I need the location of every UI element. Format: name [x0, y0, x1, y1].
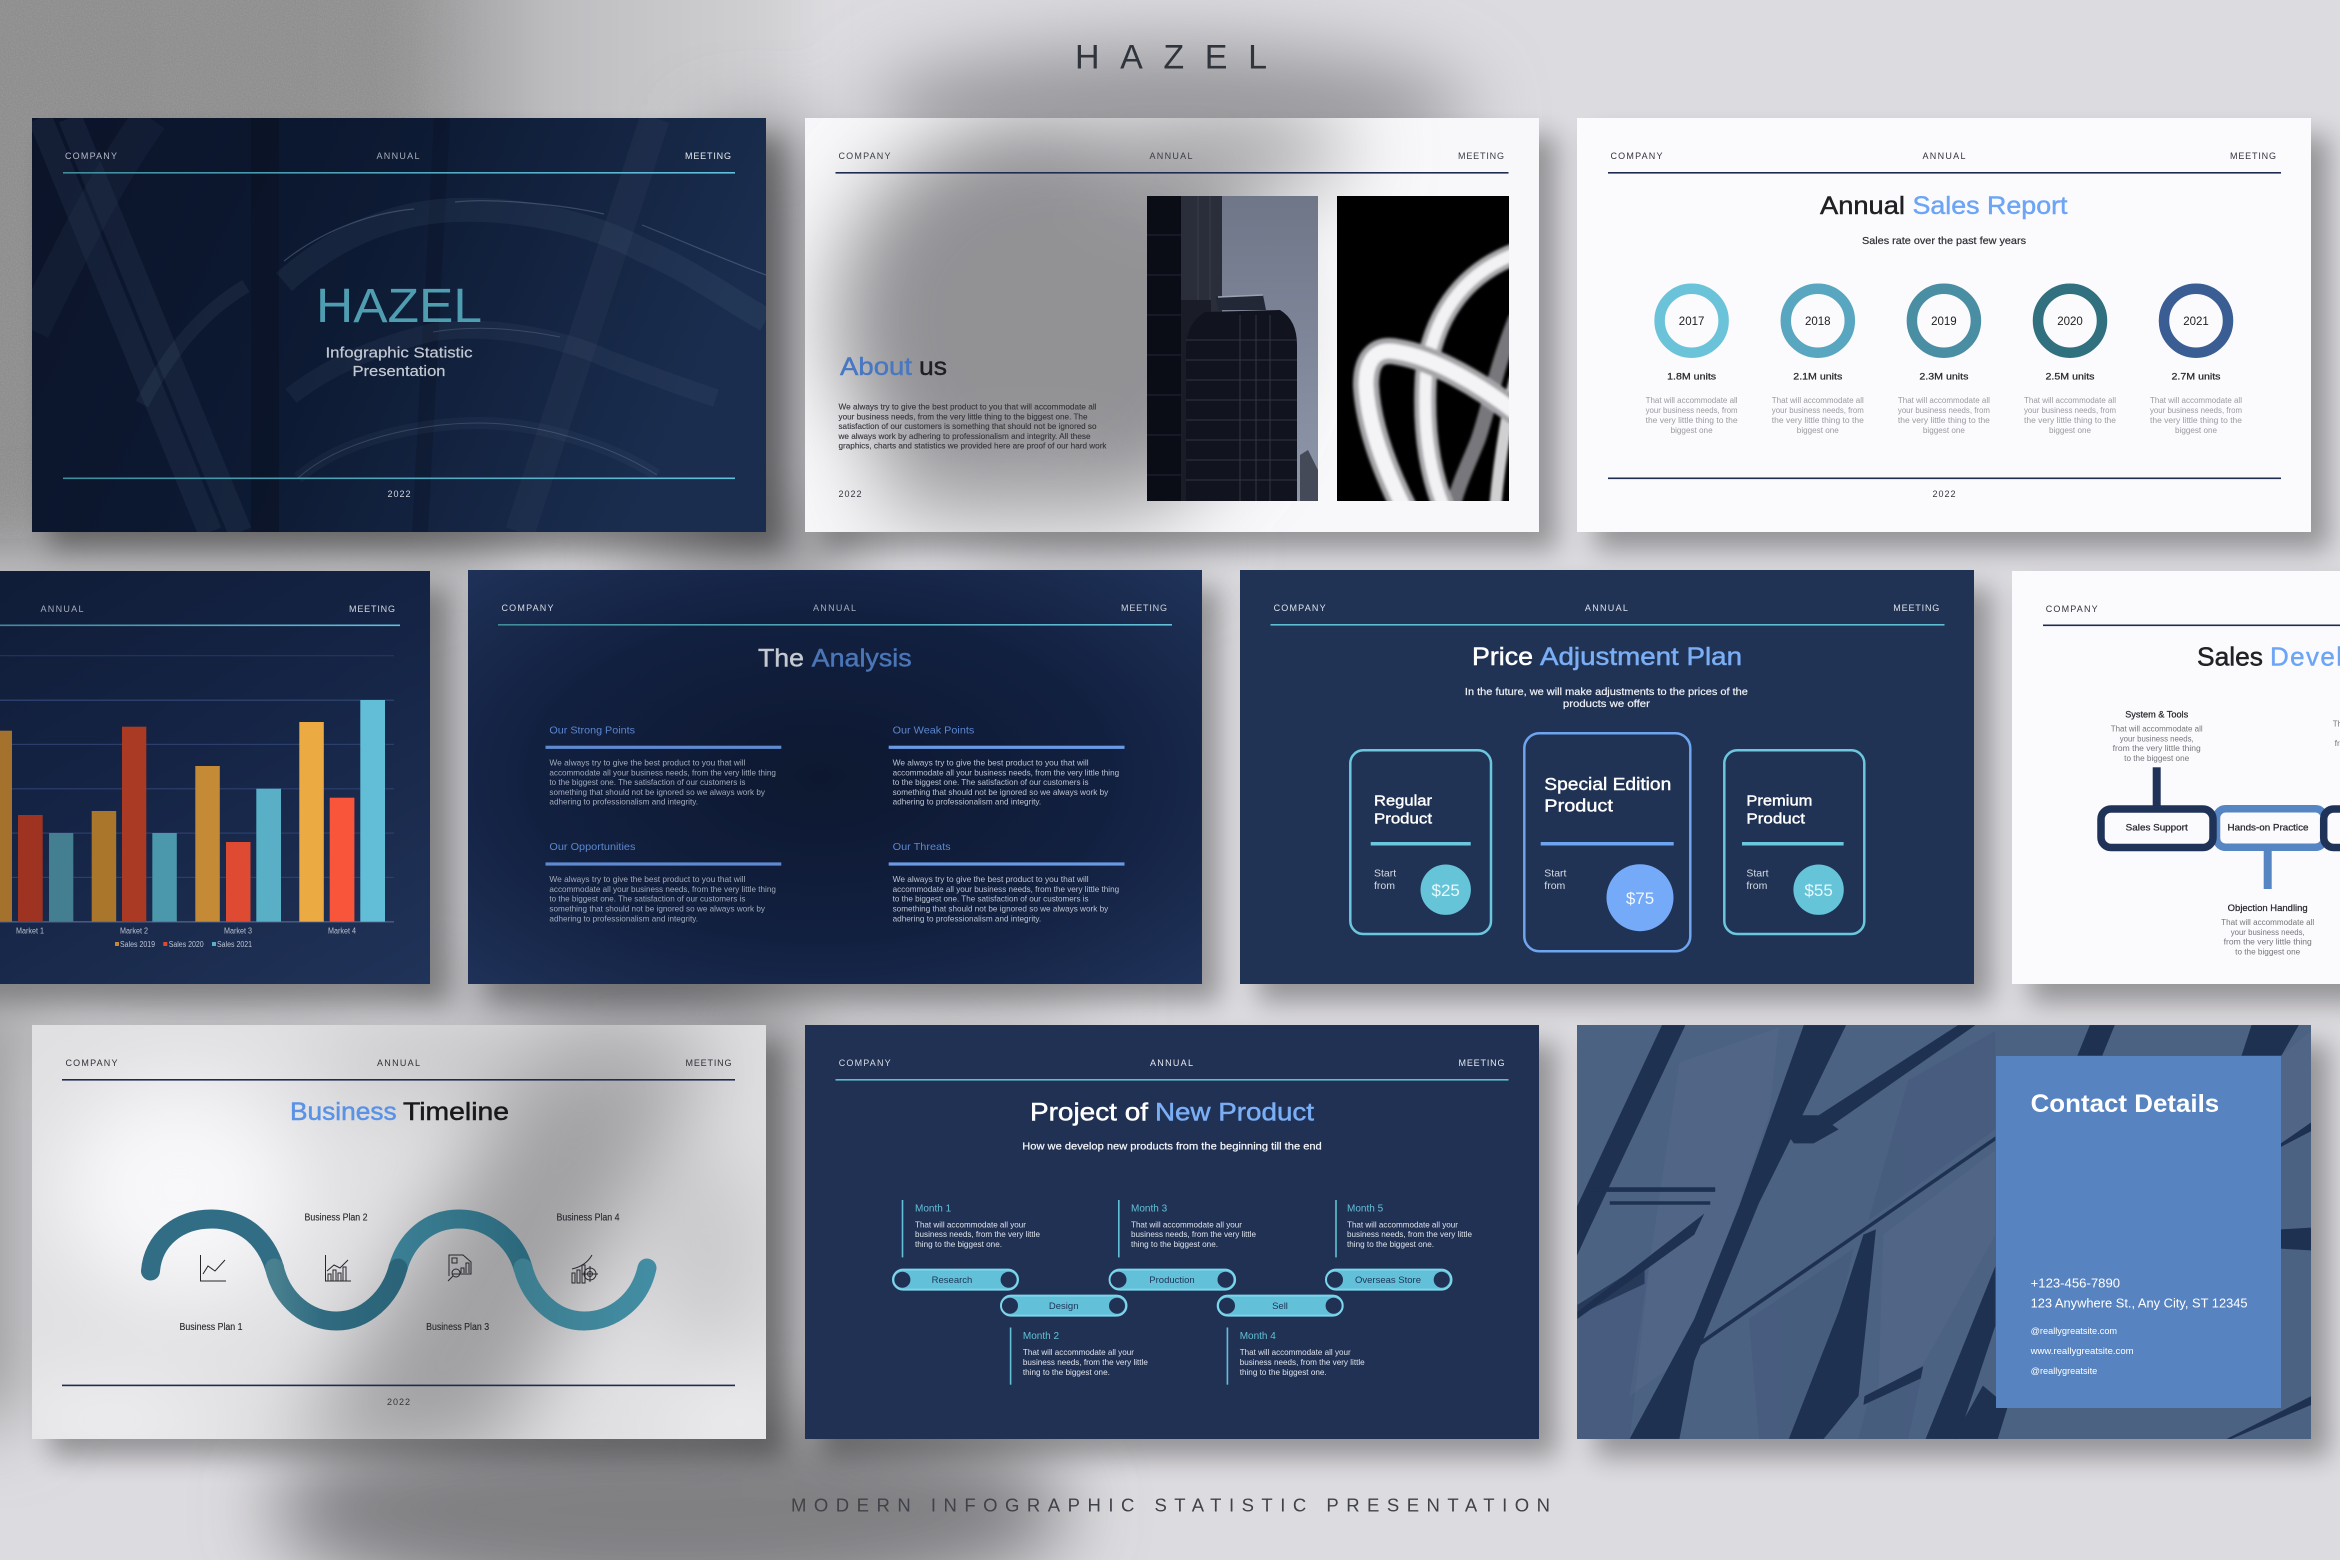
pill: research — [893, 1270, 1018, 1290]
ring descriptions: biggest one — [2049, 426, 2092, 435]
heading — [1820, 192, 2068, 220]
text: objection handling: your business needs, — [2231, 928, 2305, 937]
card: special edition product: Special Edition — [1544, 774, 1671, 794]
ring descriptions: That will accommodate all — [2150, 396, 2242, 405]
block: threats: to the biggest one. The satisfaction of our customers is — [893, 894, 1089, 904]
heading — [1030, 1098, 1314, 1126]
icon: line chart — [200, 1255, 226, 1281]
contact lines: +123-456-7890 — [2031, 1276, 2120, 1290]
text: objection handling: from the very little thing — [2224, 938, 2312, 946]
gridlines — [0, 655, 394, 923]
heading — [758, 645, 912, 673]
header labels: ANNUAL — [1585, 603, 1628, 613]
note: month 1: business needs, from the very little — [915, 1229, 1040, 1239]
heading: New Product — [1155, 1098, 1314, 1126]
ring descriptions: That will accommodate all — [2024, 396, 2116, 405]
subtitle: How we develop new products from the beginning till the end — [1022, 1141, 1322, 1153]
unit values: 2.1M units — [1793, 372, 1843, 382]
text: objection handling: Objection Handling — [2228, 903, 2308, 913]
note: month 5: business needs, from the very little — [1347, 1229, 1472, 1239]
card: regular product: Product — [1374, 810, 1433, 828]
header labels — [839, 1058, 1504, 1068]
heading: Business — [290, 1098, 397, 1126]
heading — [2197, 642, 2340, 672]
axis labels — [16, 926, 357, 936]
contact lines — [2030, 1276, 2248, 1377]
heading — [290, 1098, 509, 1126]
bars: market 3 — [195, 766, 281, 922]
ring descriptions: the very little thing to the — [1772, 416, 1864, 425]
block: opportunities: accommodate all your business needs, from the very little thing — [549, 884, 776, 894]
slide 2: about us — [805, 100, 1539, 532]
note: month 3: thing to the biggest one. — [1131, 1239, 1218, 1249]
ring descriptions: the very little thing to the — [1898, 416, 1990, 425]
block: weak points: accommodate all your business needs, from the very little thing — [893, 767, 1119, 777]
card: premium product: Premium — [1746, 792, 1812, 810]
card: special edition product: $75 — [1626, 889, 1654, 908]
card: special edition product: Start — [1544, 868, 1567, 880]
text: objection handling: to the biggest one — [2235, 948, 2301, 956]
note: month 3: business needs, from the very little — [1131, 1229, 1256, 1239]
year rings — [1660, 289, 2228, 353]
note: month 2: business needs, from the very little — [1023, 1357, 1148, 1367]
body text: We always try to give the best product to you that will accommodate all — [838, 401, 1097, 411]
contact lines: @reallygreatsite — [2031, 1366, 2097, 1377]
header labels: ANNUAL — [376, 151, 420, 161]
header labels: COMPANY — [66, 1058, 118, 1068]
heading: us — [919, 353, 947, 381]
ring descriptions: That will accommodate all — [1898, 396, 1990, 405]
block: threats — [889, 841, 1124, 923]
note: month 2: thing to the biggest one. — [1023, 1367, 1110, 1377]
ring descriptions: That will accommodate all — [1772, 396, 1864, 405]
header labels — [65, 151, 731, 161]
ring years — [1679, 316, 2209, 328]
ring descriptions: the very little thing to the — [2150, 416, 2243, 425]
header labels: MEETING — [1458, 151, 1504, 161]
year: 2022 — [388, 489, 410, 499]
ring years: 2017 — [1679, 316, 1704, 328]
icon: bars with trend — [326, 1255, 351, 1281]
note: month 4: business needs, from the very little — [1240, 1357, 1365, 1367]
slide 6: price adjustment plan — [1240, 570, 1974, 984]
text: clipped third column — [2333, 720, 2340, 748]
axis labels: Market 2 — [120, 926, 148, 936]
pill: production: Production — [1149, 1275, 1195, 1286]
bottom tagline: MODERN INFOGRAPHIC STATISTIC PRESENTATION — [791, 1495, 1550, 1516]
block: opportunities: We always try to give the best product to you that will — [549, 874, 745, 884]
year: 2022 — [1932, 489, 1956, 499]
header labels — [1274, 603, 1939, 613]
note: month 2: That will accommodate all your — [1023, 1347, 1134, 1357]
text: system and tools: System & Tools — [2125, 710, 2189, 720]
note: month 5 — [1335, 1200, 1472, 1257]
block: weak points: something that should not be ignored so we always work by — [893, 787, 1109, 797]
header labels: ANNUAL — [1922, 151, 1966, 161]
cover subtitle: Infographic Statistic — [326, 344, 473, 362]
ring descriptions: your business needs, from — [1772, 406, 1864, 415]
photo: steel beams — [1577, 1025, 2311, 1439]
icon: growth target — [572, 1255, 598, 1283]
bars: market 4 — [299, 700, 385, 922]
card: regular product — [1350, 750, 1491, 934]
note: month 3: Month 3 — [1131, 1204, 1168, 1214]
ring descriptions: your business needs, from — [2024, 406, 2116, 415]
header labels: MEETING — [686, 1058, 732, 1068]
slide 8: business timeline — [32, 1025, 766, 1439]
body text: graphics, charts and statistics we provided here are proof of our hard work — [838, 441, 1107, 451]
cover subtitle: Presentation — [352, 363, 446, 380]
connector and step: sales support: Sales Support — [2126, 822, 2188, 832]
axis labels: Market 4 — [328, 926, 357, 936]
pill: overseas store — [1326, 1270, 1452, 1290]
note: month 5: thing to the biggest one. — [1347, 1239, 1434, 1249]
year: 2022 — [838, 489, 862, 499]
subtitle: Sales rate over the past few years — [1862, 235, 2026, 247]
note: month 1 — [902, 1200, 1040, 1257]
block: threats: accommodate all your business needs, from the very little thing — [893, 884, 1119, 894]
text: system and tools: to the biggest one — [2124, 754, 2190, 763]
header labels: MEETING — [1893, 603, 1939, 613]
header labels: COMPANY — [838, 151, 890, 161]
chart legend: Sales 2020 — [169, 940, 204, 949]
block: strong points: something that should not be ignored so we always work by — [549, 787, 766, 797]
header labels: MEETING — [2230, 151, 2276, 161]
note: month 3: That will accommodate all your — [1131, 1219, 1242, 1229]
photo texture — [32, 118, 766, 532]
text: objection handling — [2221, 903, 2314, 956]
note: month 1: thing to the biggest one. — [915, 1239, 1002, 1249]
ring descriptions: That will accommodate all — [1646, 396, 1738, 405]
slide 5: the analysis — [468, 570, 1202, 984]
image: white tubes — [1337, 196, 1515, 510]
ring descriptions: biggest one — [2175, 426, 2218, 435]
heading: Timeline — [403, 1098, 509, 1126]
block: strong points: accommodate all your business needs, from the very little thing — [549, 767, 776, 777]
heading: The — [758, 645, 804, 673]
unit values: 2.7M units — [2172, 372, 2221, 382]
block: weak points: adhering to professionalism and integrity. — [893, 797, 1041, 807]
body text: we always work by adhering to professionalism and integrity. All these — [838, 431, 1091, 441]
ring years: 2019 — [1931, 316, 1957, 328]
heading: Sales — [2197, 642, 2263, 672]
panel: contact card — [1996, 1056, 2281, 1408]
connector and step: hands-on practice — [2216, 809, 2324, 889]
ring descriptions: your business needs, from — [2150, 406, 2242, 415]
contact lines: 123 Anywhere St., Any City, ST 12345 — [2031, 1296, 2248, 1310]
unit values: 2.3M units — [1919, 372, 1969, 382]
heading: About — [840, 353, 912, 381]
note: month 4: thing to the biggest one. — [1240, 1367, 1327, 1377]
block: opportunities — [546, 841, 781, 923]
pill: design — [1001, 1296, 1126, 1316]
block: weak points: Our Weak Points — [893, 724, 974, 736]
header labels: COMPANY — [1274, 603, 1326, 613]
heading: Adjustment Plan — [1540, 643, 1742, 671]
header labels: ANNUAL — [1150, 1058, 1193, 1068]
card: special edition product: Product — [1544, 796, 1613, 816]
header label: COMPANY — [2046, 604, 2098, 614]
header labels: COMPANY — [65, 151, 117, 161]
heading: Price — [1472, 643, 1533, 671]
step: clipped third — [2324, 809, 2340, 848]
ring descriptions: biggest one — [1671, 426, 1713, 435]
connector and step: sales support — [2101, 767, 2213, 848]
block: weak points — [889, 724, 1124, 807]
slide 1: cover — [32, 118, 766, 532]
block: threats: adhering to professionalism and integrity. — [893, 913, 1041, 923]
card: premium product: Start — [1746, 868, 1769, 880]
pill: sell — [1218, 1296, 1343, 1316]
cover title: HAZEL — [316, 280, 482, 333]
note: month 5: That will accommodate all your — [1347, 1219, 1458, 1229]
block: opportunities: to the biggest one. The satisfaction of our customers is — [549, 894, 745, 904]
block: opportunities: adhering to professionalism and integrity. — [549, 913, 698, 923]
card: special edition product: from — [1544, 880, 1566, 892]
pill: overseas store: Overseas Store — [1355, 1275, 1421, 1286]
block: threats: We always try to give the best product to you that will — [893, 874, 1089, 884]
text: system and tools: from the very little thing — [2113, 744, 2201, 753]
ring descriptions: biggest one — [1797, 426, 1839, 435]
timeline labels: Business Plan 2 — [304, 1212, 368, 1224]
year: 2022 — [387, 1397, 410, 1407]
text: system and tools: That will accommodate all — [2111, 724, 2203, 734]
unit values — [1667, 372, 2221, 382]
ring descriptions: your business needs, from — [1898, 406, 1990, 415]
header labels: MEETING — [685, 151, 731, 161]
header labels: MEETING — [1121, 603, 1167, 613]
card: premium product: Product — [1746, 810, 1806, 828]
header labels: ANNUAL — [377, 1058, 420, 1068]
header labels: MEETING — [1458, 1058, 1504, 1068]
header labels — [66, 1058, 732, 1068]
card: premium product: from — [1746, 880, 1768, 892]
text: system and tools — [2111, 710, 2203, 763]
block: strong points: to the biggest one. The satisfaction of our customers is — [549, 777, 745, 787]
subtitle: In the future, we will make adjustments to the prices of the — [1465, 686, 1748, 698]
card: regular product: $25 — [1432, 881, 1460, 900]
block: strong points: We always try to give the best product to you that will — [549, 757, 745, 767]
block: strong points: Our Strong Points — [549, 724, 635, 736]
block: opportunities: Our Opportunities — [549, 841, 635, 853]
chart legend: Sales 2019 — [120, 940, 155, 949]
header labels: COMPANY — [839, 1058, 891, 1068]
axis labels: Market 1 — [16, 926, 44, 936]
slide 4: bar chart — [0, 571, 430, 984]
heading: Sales Report — [1912, 192, 2068, 220]
body text — [838, 401, 1107, 451]
chart legend — [115, 940, 252, 949]
header labels: COMPANY — [1610, 151, 1662, 161]
connector and step: hands-on practice: Hands-on Practice — [2228, 822, 2308, 832]
card: premium product — [1724, 750, 1864, 934]
timeline labels: Business Plan 4 — [556, 1212, 620, 1224]
timeline labels — [180, 1212, 620, 1333]
header labels — [838, 151, 1504, 161]
image: tower — [1147, 196, 1318, 501]
note: month 2 — [1010, 1328, 1148, 1385]
pill: design: Design — [1049, 1301, 1078, 1312]
note: month 1: Month 1 — [915, 1204, 952, 1214]
card: premium product: $55 — [1804, 881, 1833, 900]
heading: Annual — [1820, 192, 1905, 220]
slide 3: annual sales report — [1577, 118, 2311, 532]
body text: satisfaction of our customers is something that should not be ignored so — [838, 421, 1097, 431]
block: threats: Our Threats — [893, 841, 951, 853]
body text: your business needs, from the very little thing to the biggest one. The — [838, 411, 1088, 421]
pill: production — [1110, 1270, 1235, 1290]
header labels — [502, 603, 1167, 613]
block: threats: something that should not be ignored so we always work by — [893, 904, 1109, 914]
timeline labels: Business Plan 1 — [180, 1322, 243, 1333]
note: month 4: That will accommodate all your — [1240, 1347, 1351, 1357]
cover subtitle — [326, 344, 473, 380]
slide 10: contact details — [1577, 1025, 2311, 1439]
axis labels: Market 3 — [224, 926, 252, 936]
main title: HAZEL — [1075, 39, 1267, 77]
ring descriptions — [1646, 396, 2243, 435]
header labels — [40, 604, 395, 614]
heading — [1472, 643, 1742, 671]
contact lines: www.reallygreatsite.com — [2030, 1346, 2134, 1357]
text: objection handling: That will accommodate all — [2221, 918, 2314, 927]
contact lines: @reallygreatsite.com — [2031, 1326, 2117, 1337]
heading: Project of — [1030, 1098, 1148, 1126]
note: month 1: That will accommodate all your — [915, 1219, 1026, 1229]
header labels: MEETING — [349, 604, 395, 614]
timeline wave — [150, 1219, 647, 1321]
card: special edition product — [1524, 733, 1690, 951]
note: month 4: Month 4 — [1240, 1331, 1276, 1342]
pill: sell: Sell — [1272, 1301, 1288, 1312]
heading — [840, 353, 947, 381]
pill: research: Research — [932, 1275, 972, 1286]
header labels — [1610, 151, 2276, 161]
icon: report with magnifier — [448, 1255, 471, 1281]
contact heading: Contact Details — [2031, 1090, 2219, 1118]
header labels: ANNUAL — [813, 603, 856, 613]
block: weak points: to the biggest one. The satisfaction of our customers is — [893, 777, 1089, 787]
header labels: ANNUAL — [40, 604, 84, 614]
ring descriptions: the very little thing to the — [2024, 416, 2117, 425]
note: month 3 — [1118, 1200, 1256, 1257]
block: opportunities: something that should not be ignored so we always work by — [549, 904, 766, 914]
block: strong points: adhering to professionalism and integrity. — [549, 797, 698, 807]
heading: Analysis — [812, 645, 912, 673]
chart legend: Sales 2021 — [217, 940, 252, 949]
block: strong points — [546, 724, 781, 807]
subtitle — [1465, 686, 1748, 710]
bars: market 2 — [92, 727, 177, 922]
timeline labels: Business Plan 3 — [426, 1322, 489, 1333]
note: month 4 — [1227, 1328, 1365, 1385]
slide 7: sales development — [2012, 571, 2340, 984]
subtitle: products we offer — [1563, 698, 1650, 710]
ring years: 2021 — [2183, 316, 2209, 328]
ring descriptions: your business needs, from — [1646, 406, 1738, 415]
slide 9: project of new product — [805, 1025, 1539, 1439]
ring descriptions: the very little thing to the — [1646, 416, 1738, 425]
unit values: 1.8M units — [1667, 372, 1716, 382]
note: month 2: Month 2 — [1023, 1331, 1059, 1342]
bars: market 1 — [0, 731, 73, 922]
card: regular product: Regular — [1374, 792, 1432, 810]
unit values: 2.5M units — [2046, 372, 2095, 382]
header labels: ANNUAL — [1150, 151, 1192, 161]
card: regular product: Start — [1374, 868, 1396, 880]
header labels: COMPANY — [502, 603, 554, 613]
text: system and tools: your business needs, — [2120, 734, 2194, 744]
ring years: 2020 — [2057, 316, 2083, 328]
note: month 5: Month 5 — [1347, 1204, 1384, 1214]
block: weak points: We always try to give the best product to you that will — [893, 757, 1089, 767]
ring years: 2018 — [1805, 316, 1831, 328]
card: regular product: from — [1374, 880, 1395, 892]
ring descriptions: biggest one — [1923, 426, 1965, 435]
